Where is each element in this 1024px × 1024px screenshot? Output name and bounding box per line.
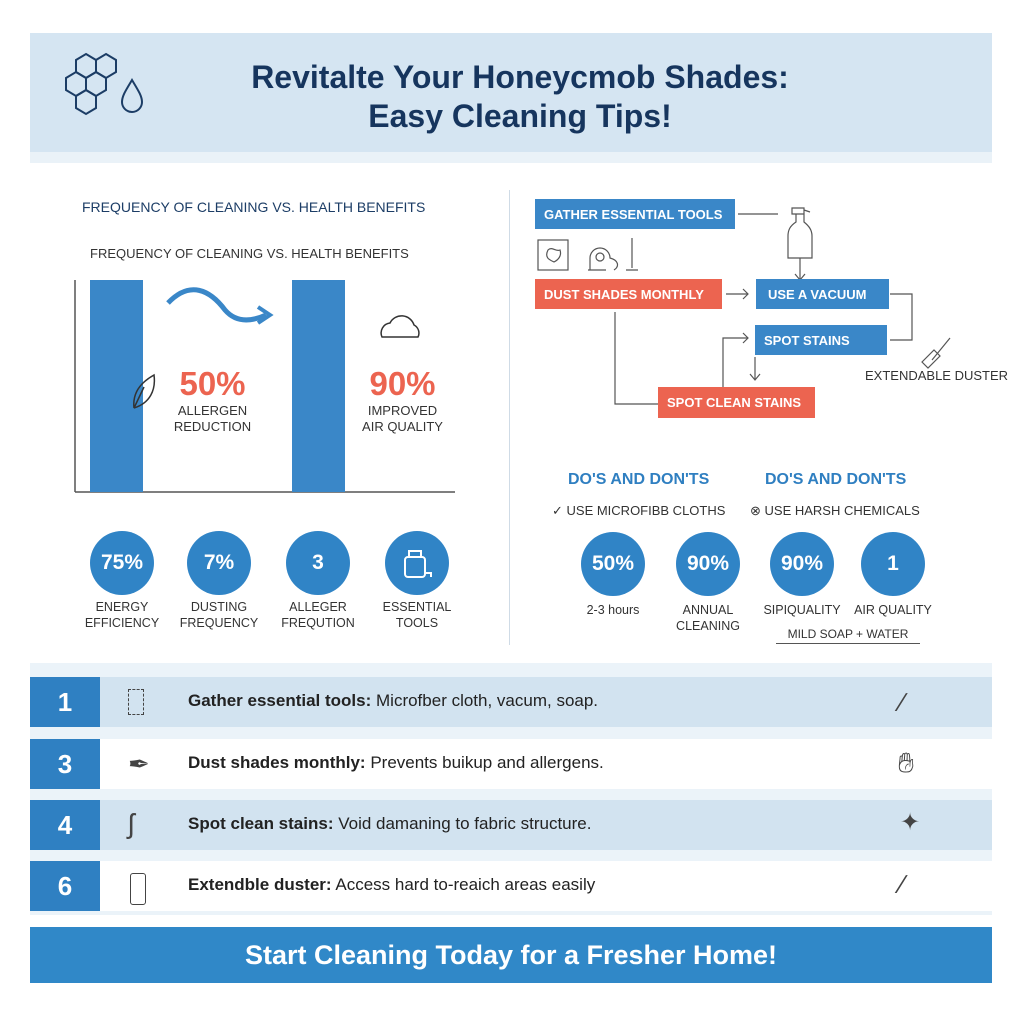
stat circles left: ENERGY	[96, 600, 148, 614]
stat circles left: 75%	[101, 551, 143, 574]
stat: 50%: ALLERGEN	[178, 403, 247, 418]
title	[251, 59, 789, 134]
box: dust	[535, 279, 722, 309]
connectors	[537, 207, 950, 405]
stat circles left: FREQUTION	[281, 616, 355, 630]
stat: 50%	[174, 365, 251, 434]
stat circles left: FREQUENCY	[180, 616, 258, 630]
step 3: ✋︎	[898, 747, 914, 778]
step 6: 6	[58, 870, 72, 900]
stat circles left: 7%	[204, 551, 234, 574]
panel: dos and donts: ⊗ USE HARSH CHEMICALS	[750, 503, 920, 518]
stat circles left: 3	[312, 551, 324, 574]
footer CTA: Start Cleaning Today for a Fresher Home!	[245, 940, 777, 970]
panel: dos and donts: MILD SOAP + WATER	[788, 627, 908, 641]
box: gather: GATHER ESSENTIAL TOOLS	[544, 206, 722, 222]
header band	[30, 33, 992, 152]
step 1: 1	[58, 686, 72, 716]
stat circles left	[85, 531, 451, 630]
step 3	[30, 739, 992, 789]
panel: dos and donts: 90%	[781, 552, 823, 575]
panel: dos and donts: 1	[887, 552, 899, 575]
stat: 50%: REDUCTION	[174, 419, 251, 434]
title: Easy Cleaning Tips!	[368, 98, 672, 134]
panel: flowchart	[535, 199, 1008, 418]
panel: dos and donts: CLEANING	[676, 619, 740, 633]
step 6: ∕	[900, 869, 904, 899]
panel: dos and donts	[552, 471, 932, 644]
step 1: ∕	[900, 687, 904, 717]
stat circles left: EFFICIENCY	[85, 616, 159, 630]
panel: dos and donts: DO'S AND DON'TS	[568, 471, 709, 488]
title: Revitalte Your Honeycmob Shades:	[251, 59, 789, 95]
panel: dos and donts: 2-3 hours	[587, 603, 639, 617]
box: spot stains: SPOT STAINS	[764, 332, 850, 348]
step 4	[30, 800, 992, 850]
stat circles left: ESSENTIAL	[383, 600, 451, 614]
stat: 90%: 90%	[369, 365, 436, 402]
divider	[509, 190, 510, 645]
stat: 90%	[362, 365, 443, 434]
box: spot clean: SPOT CLEAN STAINS	[667, 395, 801, 410]
stat: 90%: IMPROVED	[368, 403, 437, 418]
step 4: ✦	[900, 809, 920, 836]
box: spot stains	[755, 325, 887, 355]
step 3: Dust shades monthly: Prevents buikup and allergens.	[188, 753, 604, 772]
panel: dos and donts: AIR QUALITY	[854, 603, 932, 617]
panel: dos and donts: SIPIQUALITY	[763, 603, 841, 617]
step 1: Gather essential tools: Microfber cloth, vacum, soap.	[188, 691, 598, 710]
box: spot clean	[658, 387, 815, 418]
stat circles left: DUSTING	[191, 600, 247, 614]
bar chart	[74, 280, 455, 493]
panel: dos and donts: ✓ USE MICROFIBB CLOTHS	[552, 503, 725, 518]
step 1	[30, 677, 992, 727]
stat circles left: ALLEGER	[289, 600, 347, 614]
step 3: ✒	[128, 749, 150, 779]
panel: chart	[74, 199, 455, 493]
step 6: Extendble duster: Access hard to-reaich areas easily	[188, 875, 595, 894]
panel: steps	[30, 663, 992, 915]
box: gather	[535, 199, 735, 229]
panel: dos and donts: 90%	[687, 552, 729, 575]
icon: honeycomb and drop	[65, 52, 143, 116]
chart subheading: FREQUENCY OF CLEANING VS. HEALTH BENEFITS	[90, 246, 409, 261]
step 4: Spot clean stains: Void damaning to fabric structure.	[188, 814, 591, 833]
step 4: ʃ	[128, 808, 134, 839]
box: dust: DUST SHADES MONTHLY	[544, 286, 704, 302]
footer CTA	[30, 927, 992, 983]
panel: dos and donts: DO'S AND DON'TS	[765, 471, 906, 488]
chart heading: FREQUENCY OF CLEANING VS. HEALTH BENEFITS	[82, 199, 425, 215]
step 3: 3	[58, 748, 72, 778]
box: vacuum: USE A VACUUM	[768, 286, 866, 302]
step 6	[30, 861, 992, 911]
panel: dos and donts: ANNUAL	[683, 603, 733, 617]
stat: 50%: 50%	[179, 365, 246, 402]
label: extendable duster: EXTENDABLE DUSTER	[865, 368, 1008, 383]
step 4: 4	[58, 810, 72, 840]
box: vacuum	[756, 279, 889, 309]
stat: 90%: AIR QUALITY	[362, 419, 443, 434]
panel: dos and donts: 50%	[592, 552, 634, 575]
stat circles left: TOOLS	[396, 616, 438, 630]
